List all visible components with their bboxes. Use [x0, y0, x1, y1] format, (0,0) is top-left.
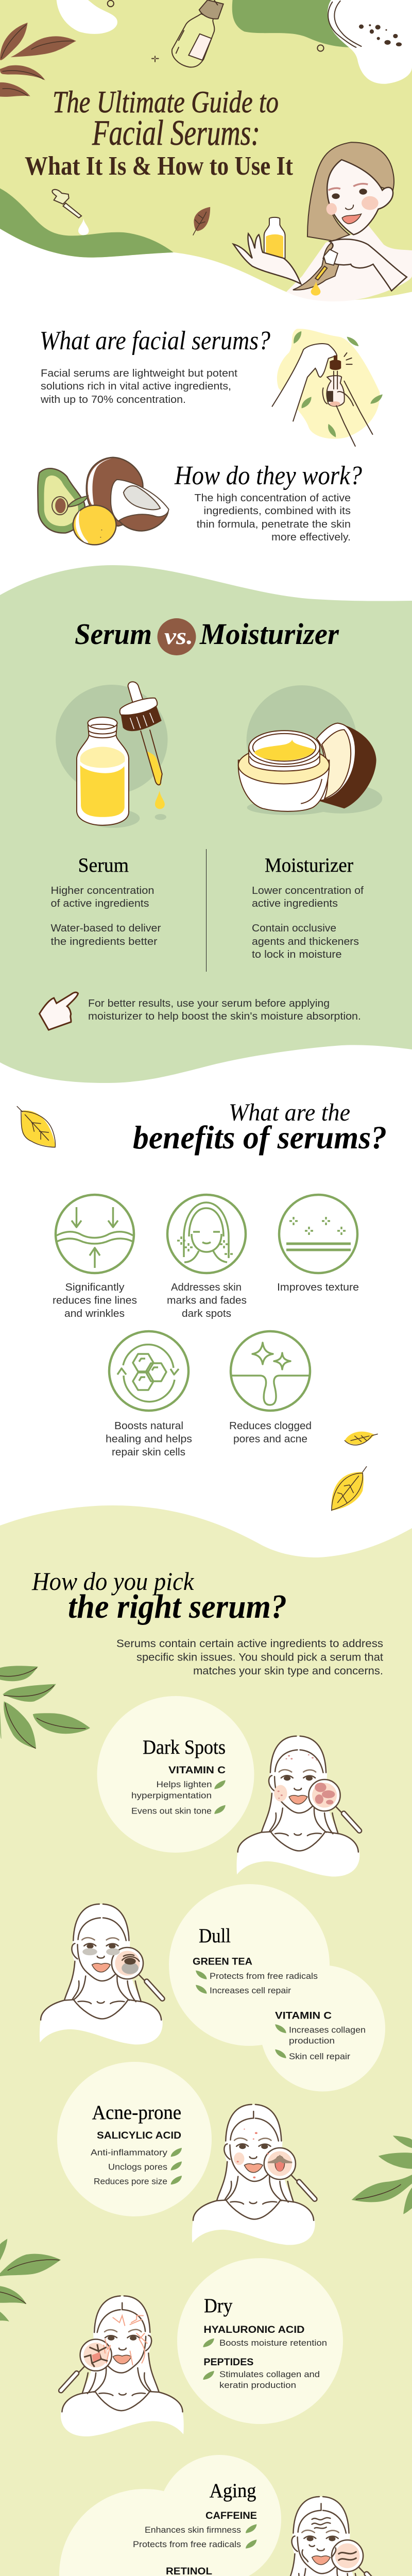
text block: matches your skin type and concerns. — [193, 1665, 383, 1677]
column: moisturizer: Lower concentration of — [252, 885, 364, 896]
text block — [116, 1638, 383, 1677]
heading: Moisturizer — [199, 617, 339, 651]
card: dark spots — [97, 1696, 254, 1853]
benefit: healing: Boosts natural — [114, 1420, 183, 1432]
card: dry: Stimulates collagen and — [219, 2369, 320, 2379]
card: acne-prone: Acne-prone — [92, 2102, 181, 2124]
title: The Ultimate Guide to — [53, 85, 279, 119]
text block: specific skin issues. You should pick a serum that — [136, 1652, 383, 1663]
text block: ingredients, combined with its — [203, 505, 351, 517]
icon: green leaves left — [0, 1666, 90, 1749]
column: moisturizer: Moisturizer — [265, 854, 353, 876]
benefit: dark spots: marks and fades — [167, 1295, 247, 1307]
card: acne-prone: Reduces pore size — [94, 2176, 167, 2186]
column: moisturizer: to lock in moisture — [252, 949, 342, 960]
panel: serum vs moisturizer — [0, 565, 412, 1083]
illustration: woman with acne — [192, 2105, 315, 2245]
panel: hero header — [0, 0, 412, 301]
benefit: healing — [106, 1331, 192, 1458]
illustration: woman applying serum — [233, 142, 412, 301]
panel background — [0, 565, 412, 1083]
text block: Facial serums are lightweight but potent — [41, 368, 237, 379]
heading — [31, 1567, 287, 1625]
benefit: healing: healing and helps — [106, 1433, 192, 1445]
heading: What are facial serums? — [40, 326, 270, 355]
benefit: texture — [277, 1195, 359, 1293]
card: dry: HYALURONIC ACID — [203, 2325, 304, 2335]
illustration: serum bottle and dropper — [56, 682, 168, 828]
card: dull — [169, 1884, 385, 2092]
card: aging: Aging — [210, 2480, 256, 2502]
title: Facial Serums: — [92, 113, 260, 153]
card: aging: CAFFEINE — [205, 2511, 257, 2521]
column: serum: of active ingredients — [50, 898, 149, 909]
column: moisturizer: agents and thickeners — [252, 936, 359, 947]
card: dull: Dull — [199, 1925, 231, 1947]
icon: pointing hand — [40, 992, 78, 1030]
column: serum: Water-based to deliver — [50, 923, 161, 934]
card: dry: keratin production — [219, 2380, 296, 2390]
callout: tip: moisturizer to help boost the skin's moisture absorption. — [88, 1011, 361, 1022]
card: dark spots: hyperpigmentation — [131, 1791, 212, 1801]
callout: tip — [88, 998, 361, 1022]
section: benefits of serums — [17, 1099, 387, 1511]
callout: tip: For better results, use your serum before applying — [88, 998, 330, 1009]
card: acne-prone: Unclogs pores — [108, 2162, 167, 2172]
card: acne-prone — [57, 2062, 212, 2216]
card: dry: Boosts moisture retention — [219, 2338, 327, 2348]
icon: yellow leaves right — [332, 1432, 377, 1511]
icon: brown leaves — [0, 23, 76, 97]
heading — [133, 1099, 387, 1156]
text block: The high concentration of active — [195, 493, 351, 504]
benefit: pores — [229, 1331, 312, 1445]
benefit: fine lines: and wrinkles — [64, 1308, 125, 1319]
heading: benefits of serums? — [133, 1119, 387, 1156]
card: dry: Dry — [204, 2295, 233, 2317]
benefit: fine lines: reduces fine lines — [53, 1295, 137, 1307]
card: dark spots: Evens out skin tone — [131, 1806, 212, 1816]
illustration: avocado, coconut and lemon — [38, 457, 169, 545]
illustration: woman with dark spots — [236, 1736, 359, 1876]
card: aging: Protects from free radicals — [133, 2539, 241, 2549]
small circle accents — [108, 1, 324, 62]
benefit: healing: repair skin cells — [112, 1447, 185, 1458]
benefit: pores: Reduces clogged — [229, 1420, 312, 1432]
icon: green leaves right — [352, 2136, 412, 2214]
text block: more effectively. — [271, 532, 351, 543]
card: acne-prone: Anti-inflammatory — [91, 2148, 168, 2158]
card: aging: Enhances skin firmness — [145, 2525, 241, 2535]
heading: What are the — [229, 1099, 350, 1126]
illustration: woman with dry skin — [61, 2296, 184, 2436]
card: dull: Protects from free radicals — [210, 1971, 318, 1981]
icon: dropper with drop — [52, 190, 89, 235]
heading: Serum — [75, 617, 152, 651]
card: dry: PEPTIDES — [203, 2357, 253, 2368]
benefit: fine lines — [53, 1195, 137, 1319]
text block: Serums contain certain active ingredients to address — [116, 1638, 383, 1650]
icon: yellow leaf left — [17, 1106, 56, 1147]
column: moisturizer: active ingredients — [252, 898, 338, 909]
card: dull: production — [289, 2036, 335, 2046]
green blob top right — [232, 0, 352, 47]
hero background — [0, 0, 412, 300]
card: dark spots: VITAMIN C — [168, 1765, 226, 1776]
illustration: moisturizer jar with lid — [238, 685, 382, 815]
benefit: dark spots — [167, 1195, 247, 1319]
text block — [195, 493, 351, 543]
card: dull: Increases cell repair — [210, 1986, 291, 1995]
card: dry — [177, 2258, 343, 2424]
benefit: dark spots: Addresses skin — [171, 1282, 242, 1293]
text block: solutions rich in vital active ingredients, — [41, 381, 231, 392]
white blob top left — [57, 0, 117, 34]
card: dull: Skin cell repair — [289, 2052, 350, 2061]
text block: with up to 70% concentration. — [40, 394, 186, 405]
heading: the right serum? — [68, 1588, 287, 1625]
column: serum: Higher concentration — [50, 885, 154, 896]
panel background — [0, 1505, 412, 2576]
text block: thin formula, penetrate the skin — [197, 519, 351, 530]
column: serum — [50, 854, 161, 947]
section: what are facial serums — [38, 326, 383, 545]
benefit: fine lines: Significantly — [65, 1282, 125, 1293]
column: serum: Serum — [78, 854, 129, 876]
column: moisturizer — [252, 854, 364, 960]
icon: brown leaf — [193, 207, 210, 235]
heading: vs. — [164, 623, 193, 649]
card: aging — [59, 2455, 281, 2576]
white blob top right — [328, 0, 412, 84]
title: What It Is & How to Use It — [25, 151, 294, 181]
benefit: dark spots: dark spots — [182, 1308, 231, 1319]
green blob bottom left — [0, 188, 174, 258]
heading: How do you pick — [31, 1567, 194, 1596]
title — [25, 85, 294, 181]
card: dark spots: Dark Spots — [143, 1736, 226, 1758]
card: acne-prone: SALICYLIC ACID — [97, 2130, 181, 2141]
illustration: hands with serum dropper — [272, 329, 383, 446]
illustration: woman with dull skin — [40, 1904, 163, 2044]
card: dull: GREEN TEA — [193, 1957, 252, 1967]
illustration: woman with aging skin — [260, 2497, 383, 2576]
heading — [75, 617, 339, 655]
heading: How do they work? — [174, 461, 362, 490]
card: dull: Increases collagen — [289, 2025, 366, 2035]
icon: serum bottle — [172, 0, 224, 67]
column: moisturizer: Contain occlusive — [252, 923, 336, 934]
icon: green leaves left — [0, 2239, 61, 2321]
text block — [40, 368, 237, 405]
benefit: texture: Improves texture — [277, 1282, 359, 1293]
column: serum: the ingredients better — [50, 936, 158, 947]
card: dark spots: Helps lighten — [157, 1780, 212, 1789]
card: dull: VITAMIN C — [275, 2010, 332, 2021]
benefit: pores: pores and acne — [233, 1433, 307, 1445]
panel: how do you pick the right serum — [0, 1505, 412, 2576]
